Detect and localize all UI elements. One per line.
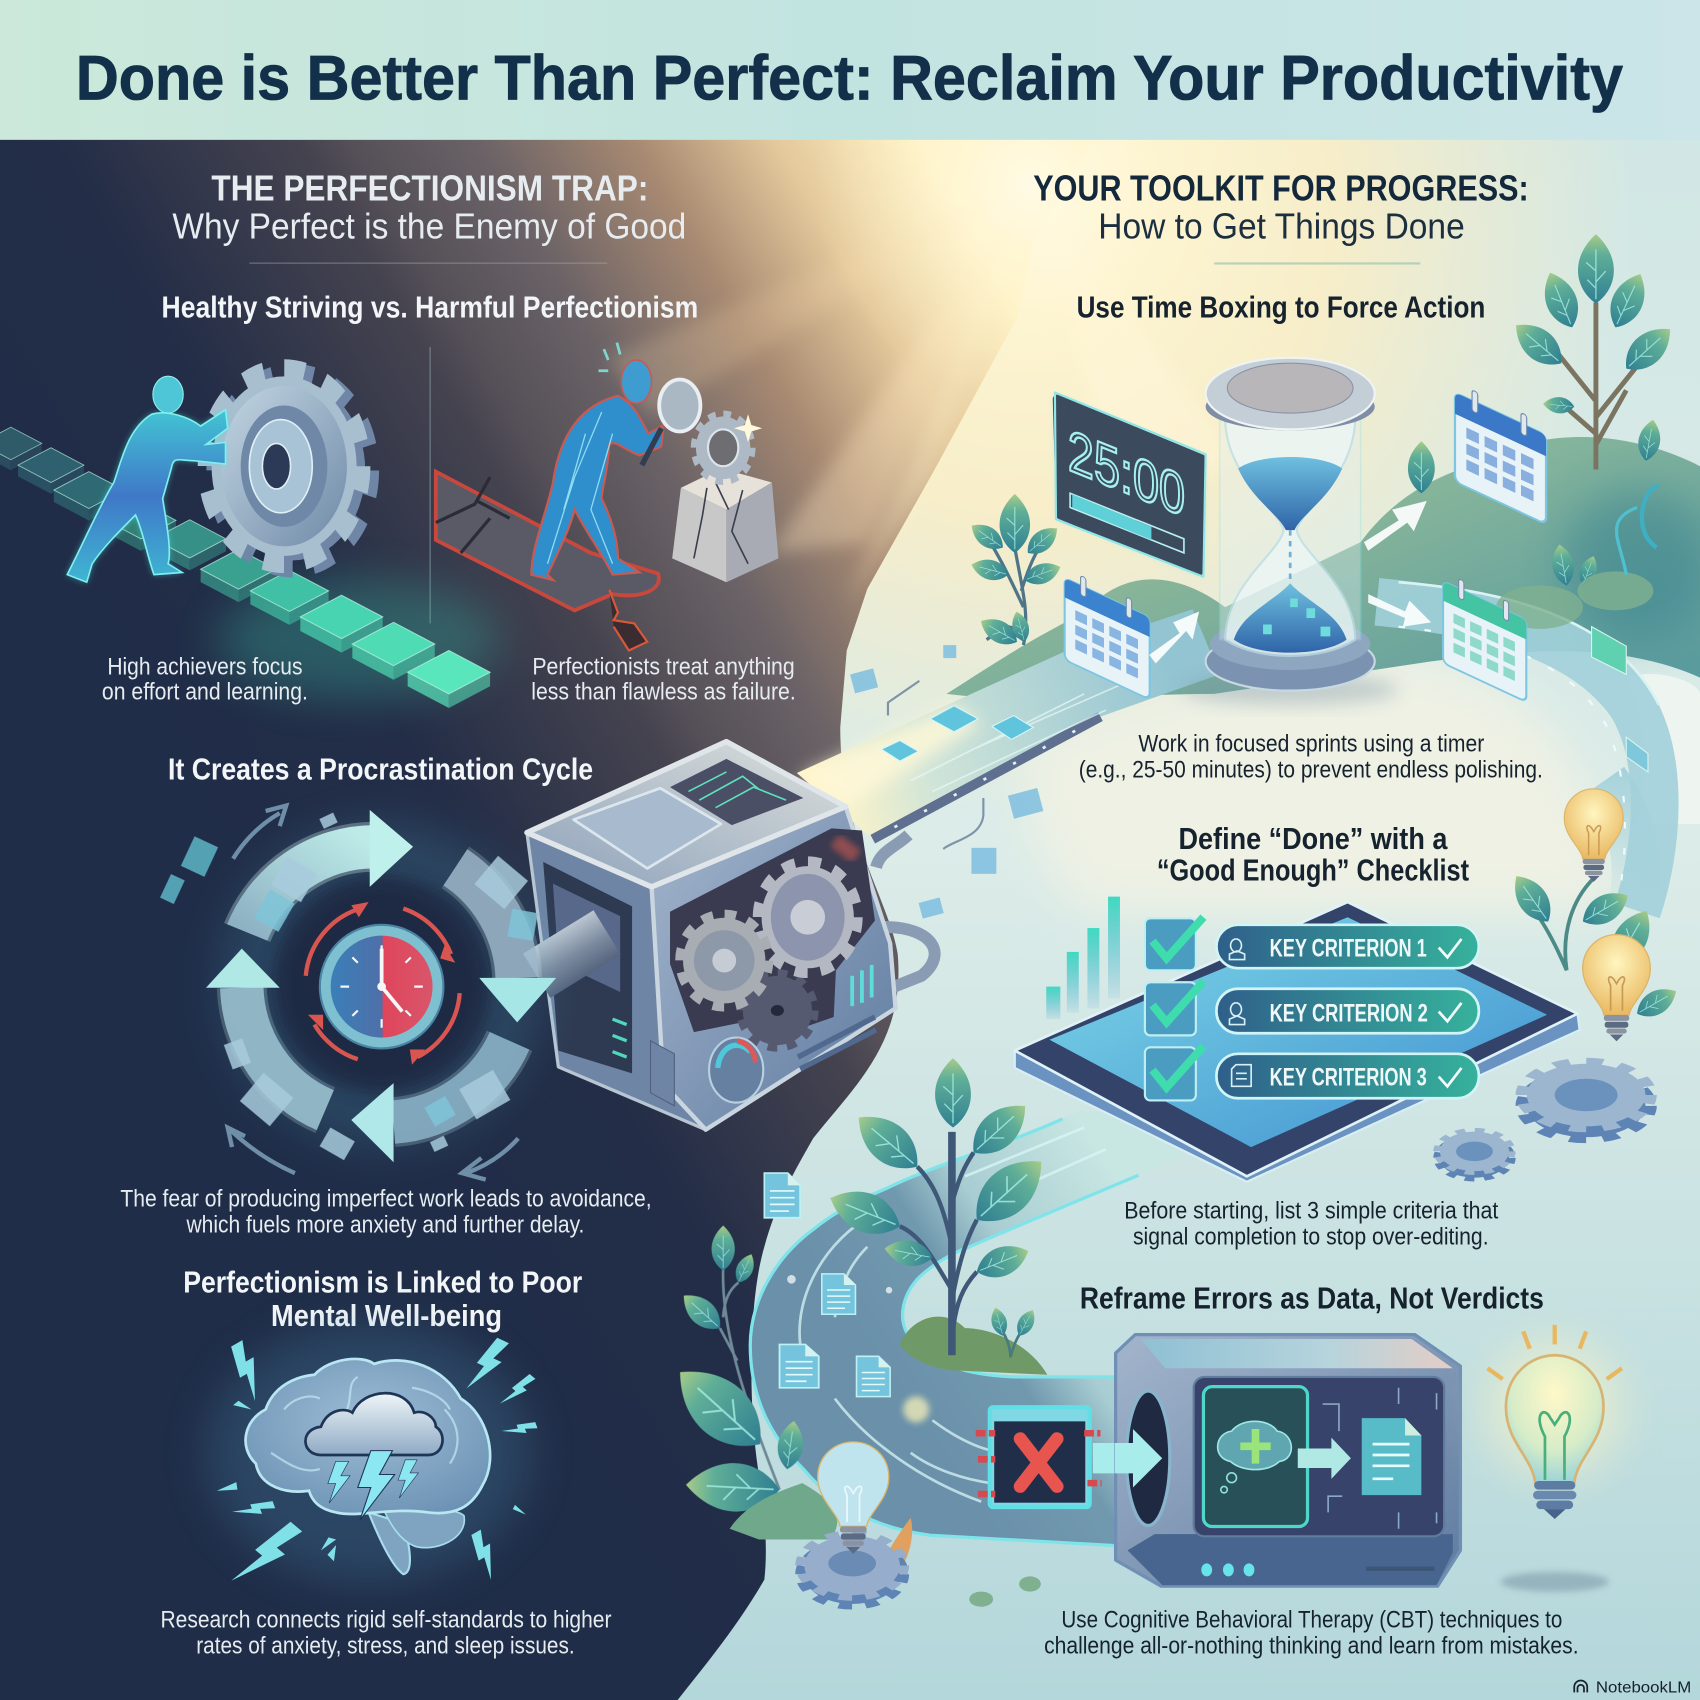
checklist row 2: KEY CRITERION 2 <box>1270 999 1428 1027</box>
red inner arrows <box>306 909 460 1059</box>
text: high achievers: High achievers focus <box>107 653 302 680</box>
heading: the perfectionism trap: Why Perfect is the Enemy of Good <box>172 207 686 247</box>
cloud bolts <box>328 1451 418 1520</box>
illustration: reframing machine <box>1115 1335 1460 1586</box>
arrow: error into machine <box>1093 1429 1160 1488</box>
illustration: central sapling <box>823 1058 1056 1375</box>
heading: define done: Define “Done” with a <box>1179 823 1448 856</box>
icons: calendars <box>1065 382 1546 702</box>
figure: person pushing gear <box>67 376 228 582</box>
machine lights <box>1201 1563 1434 1576</box>
text: before starting: Before starting, list 3 simple criteria that <box>1124 1198 1499 1225</box>
heading: linked to poor mental well-being: Mental Well-being <box>271 1300 502 1333</box>
text: before starting: signal completion to stop over-editing. <box>1133 1224 1489 1251</box>
illustration: plant and lightbulbs <box>1505 789 1682 1041</box>
watermark: NotebookLM: NotebookLM <box>1596 1679 1691 1696</box>
icon: timer panel: 25:00 <box>1068 417 1185 529</box>
brain <box>246 1359 490 1514</box>
arrow: bottom <box>351 1041 510 1162</box>
heading: your toolkit for progress: YOUR TOOLKIT FOR PROGRESS: <box>1033 169 1529 209</box>
heading: your toolkit for progress <box>1033 169 1529 247</box>
figure: perfectionist with magnifier <box>531 343 700 580</box>
top plate <box>574 788 721 868</box>
left opening <box>537 862 632 1073</box>
right face <box>652 807 896 1130</box>
arrow: right <box>455 867 556 1022</box>
small plant left of the timer <box>966 494 1064 651</box>
text: CBT <box>1044 1606 1579 1659</box>
road: hills around hourglass <box>946 437 1700 824</box>
icon: glowing lightbulb <box>1488 1325 1622 1592</box>
illustration: gear machine <box>527 742 935 1130</box>
top face <box>527 742 846 887</box>
floating fragments <box>160 813 538 1160</box>
storm cloud <box>305 1393 443 1455</box>
illustration: tall tree <box>1408 234 1680 629</box>
road: conveyor stream from machine to hourglass <box>797 609 1220 919</box>
checklist row 3 <box>1145 1046 1479 1100</box>
dark left panel <box>0 139 1095 1700</box>
text: perfectionists: Perfectionists treat anything <box>532 653 795 680</box>
icon: error card with red X <box>976 1407 1102 1507</box>
sun rays <box>607 139 1301 607</box>
left face <box>527 833 706 1130</box>
icon: cracked pedestal with small gear <box>672 414 778 582</box>
icon: brain with storm cloud <box>206 1323 538 1596</box>
icons: flat gears <box>1437 1061 1650 1179</box>
small floating tiles on right road <box>1592 627 1648 772</box>
text: focused sprints: Work in focused sprints using a timer <box>1138 730 1484 757</box>
illustration: tablet with checklist <box>1015 902 1580 1182</box>
text: fear of imperfect work: which fuels more anxiety and further delay. <box>186 1212 584 1239</box>
text: research: rates of anxiety, stress, and sleep issues. <box>196 1632 575 1659</box>
illustration: left foliage <box>661 1226 1041 1607</box>
floating data icons <box>850 645 1043 919</box>
text: perfectionists <box>531 653 796 705</box>
arrow: top <box>247 810 413 932</box>
road: flow from hourglass curving right <box>1377 582 1659 911</box>
road: winding lower path <box>750 1110 1193 1546</box>
illustration: cracked red path <box>436 472 659 651</box>
circuit panel <box>670 759 803 825</box>
heading: the perfectionism trap <box>172 169 686 247</box>
icon: bar chart <box>1046 897 1120 1019</box>
text: focused sprints <box>1079 730 1543 783</box>
text: high achievers <box>102 653 308 705</box>
checklist row 3: KEY CRITERION 3 <box>1270 1063 1427 1091</box>
text: focused sprints: (e.g., 25-50 minutes) to prevent endless polishing. <box>1079 756 1543 783</box>
illustration: stepping tiles <box>0 427 499 708</box>
icon: large gear <box>206 369 371 567</box>
text: CBT: challenge all-or-nothing thinking and learn from mistakes. <box>1044 1632 1579 1659</box>
heading: define done <box>1157 823 1469 887</box>
icon: clock <box>320 925 443 1048</box>
icon: timer panel <box>1055 392 1206 577</box>
title: Done is Better Than Perfect: Reclaim Your Productivity <box>76 44 1623 114</box>
checklist row 1 <box>1145 917 1479 970</box>
text: before starting <box>1124 1198 1499 1251</box>
heading: healthy striving vs harmful perfectionism: Healthy Striving vs. Harmful Perfectionism <box>162 292 698 325</box>
heading: define done: “Good Enough” Checklist <box>1157 854 1469 887</box>
pale ground behind the hourglass <box>1023 648 1609 911</box>
machine screen <box>1194 1377 1444 1536</box>
checklist row 1: KEY CRITERION 1 <box>1270 934 1427 962</box>
connector wires <box>888 681 983 849</box>
icon: gear with dim bulb <box>801 1442 904 1606</box>
icon: hourglass <box>1182 358 1399 705</box>
text: research: Research connects rigid self-standards to higher <box>160 1606 611 1633</box>
gear cavity <box>670 828 875 1048</box>
pipes <box>876 835 935 987</box>
checklist row 2 <box>1145 981 1479 1035</box>
heading: linked to poor mental well-being <box>183 1266 582 1333</box>
heading: procrastination cycle: It Creates a Procrastination Cycle <box>168 754 593 787</box>
icons: flow arrows <box>1149 501 1431 664</box>
outer thin arrows <box>228 806 518 1180</box>
heading: linked to poor mental well-being: Perfectionism is Linked to Poor <box>183 1266 582 1299</box>
icons: floating documents <box>764 1173 890 1397</box>
surrounding sparks <box>217 1334 538 1596</box>
text: fear of imperfect work: The fear of producing imperfect work leads to avoidance, <box>120 1186 652 1213</box>
conveyor tiles <box>881 706 1033 761</box>
title banner <box>0 0 1700 140</box>
text: research <box>160 1606 611 1659</box>
heading: time boxing: Use Time Boxing to Force Action <box>1077 292 1485 325</box>
text: CBT: Use Cognitive Behavioral Therapy (CBT) techniques to <box>1061 1606 1562 1633</box>
text: perfectionists: less than flawless as failure. <box>531 678 796 705</box>
heading: reframe errors: Reframe Errors as Data, Not Verdicts <box>1080 1283 1544 1316</box>
diagram: procrastination cycle <box>160 806 556 1180</box>
brain stem and cerebellum <box>369 1512 410 1574</box>
heading: the perfectionism trap: THE PERFECTIONISM TRAP: <box>211 169 648 209</box>
text: fear of imperfect work <box>120 1186 652 1239</box>
heading: your toolkit for progress: How to Get Things Done <box>1098 207 1465 247</box>
machine intake <box>1126 1391 1170 1525</box>
text: high achievers: on effort and learning. <box>102 678 308 705</box>
dial and slots <box>651 965 876 1106</box>
arrow: left <box>206 949 325 1110</box>
